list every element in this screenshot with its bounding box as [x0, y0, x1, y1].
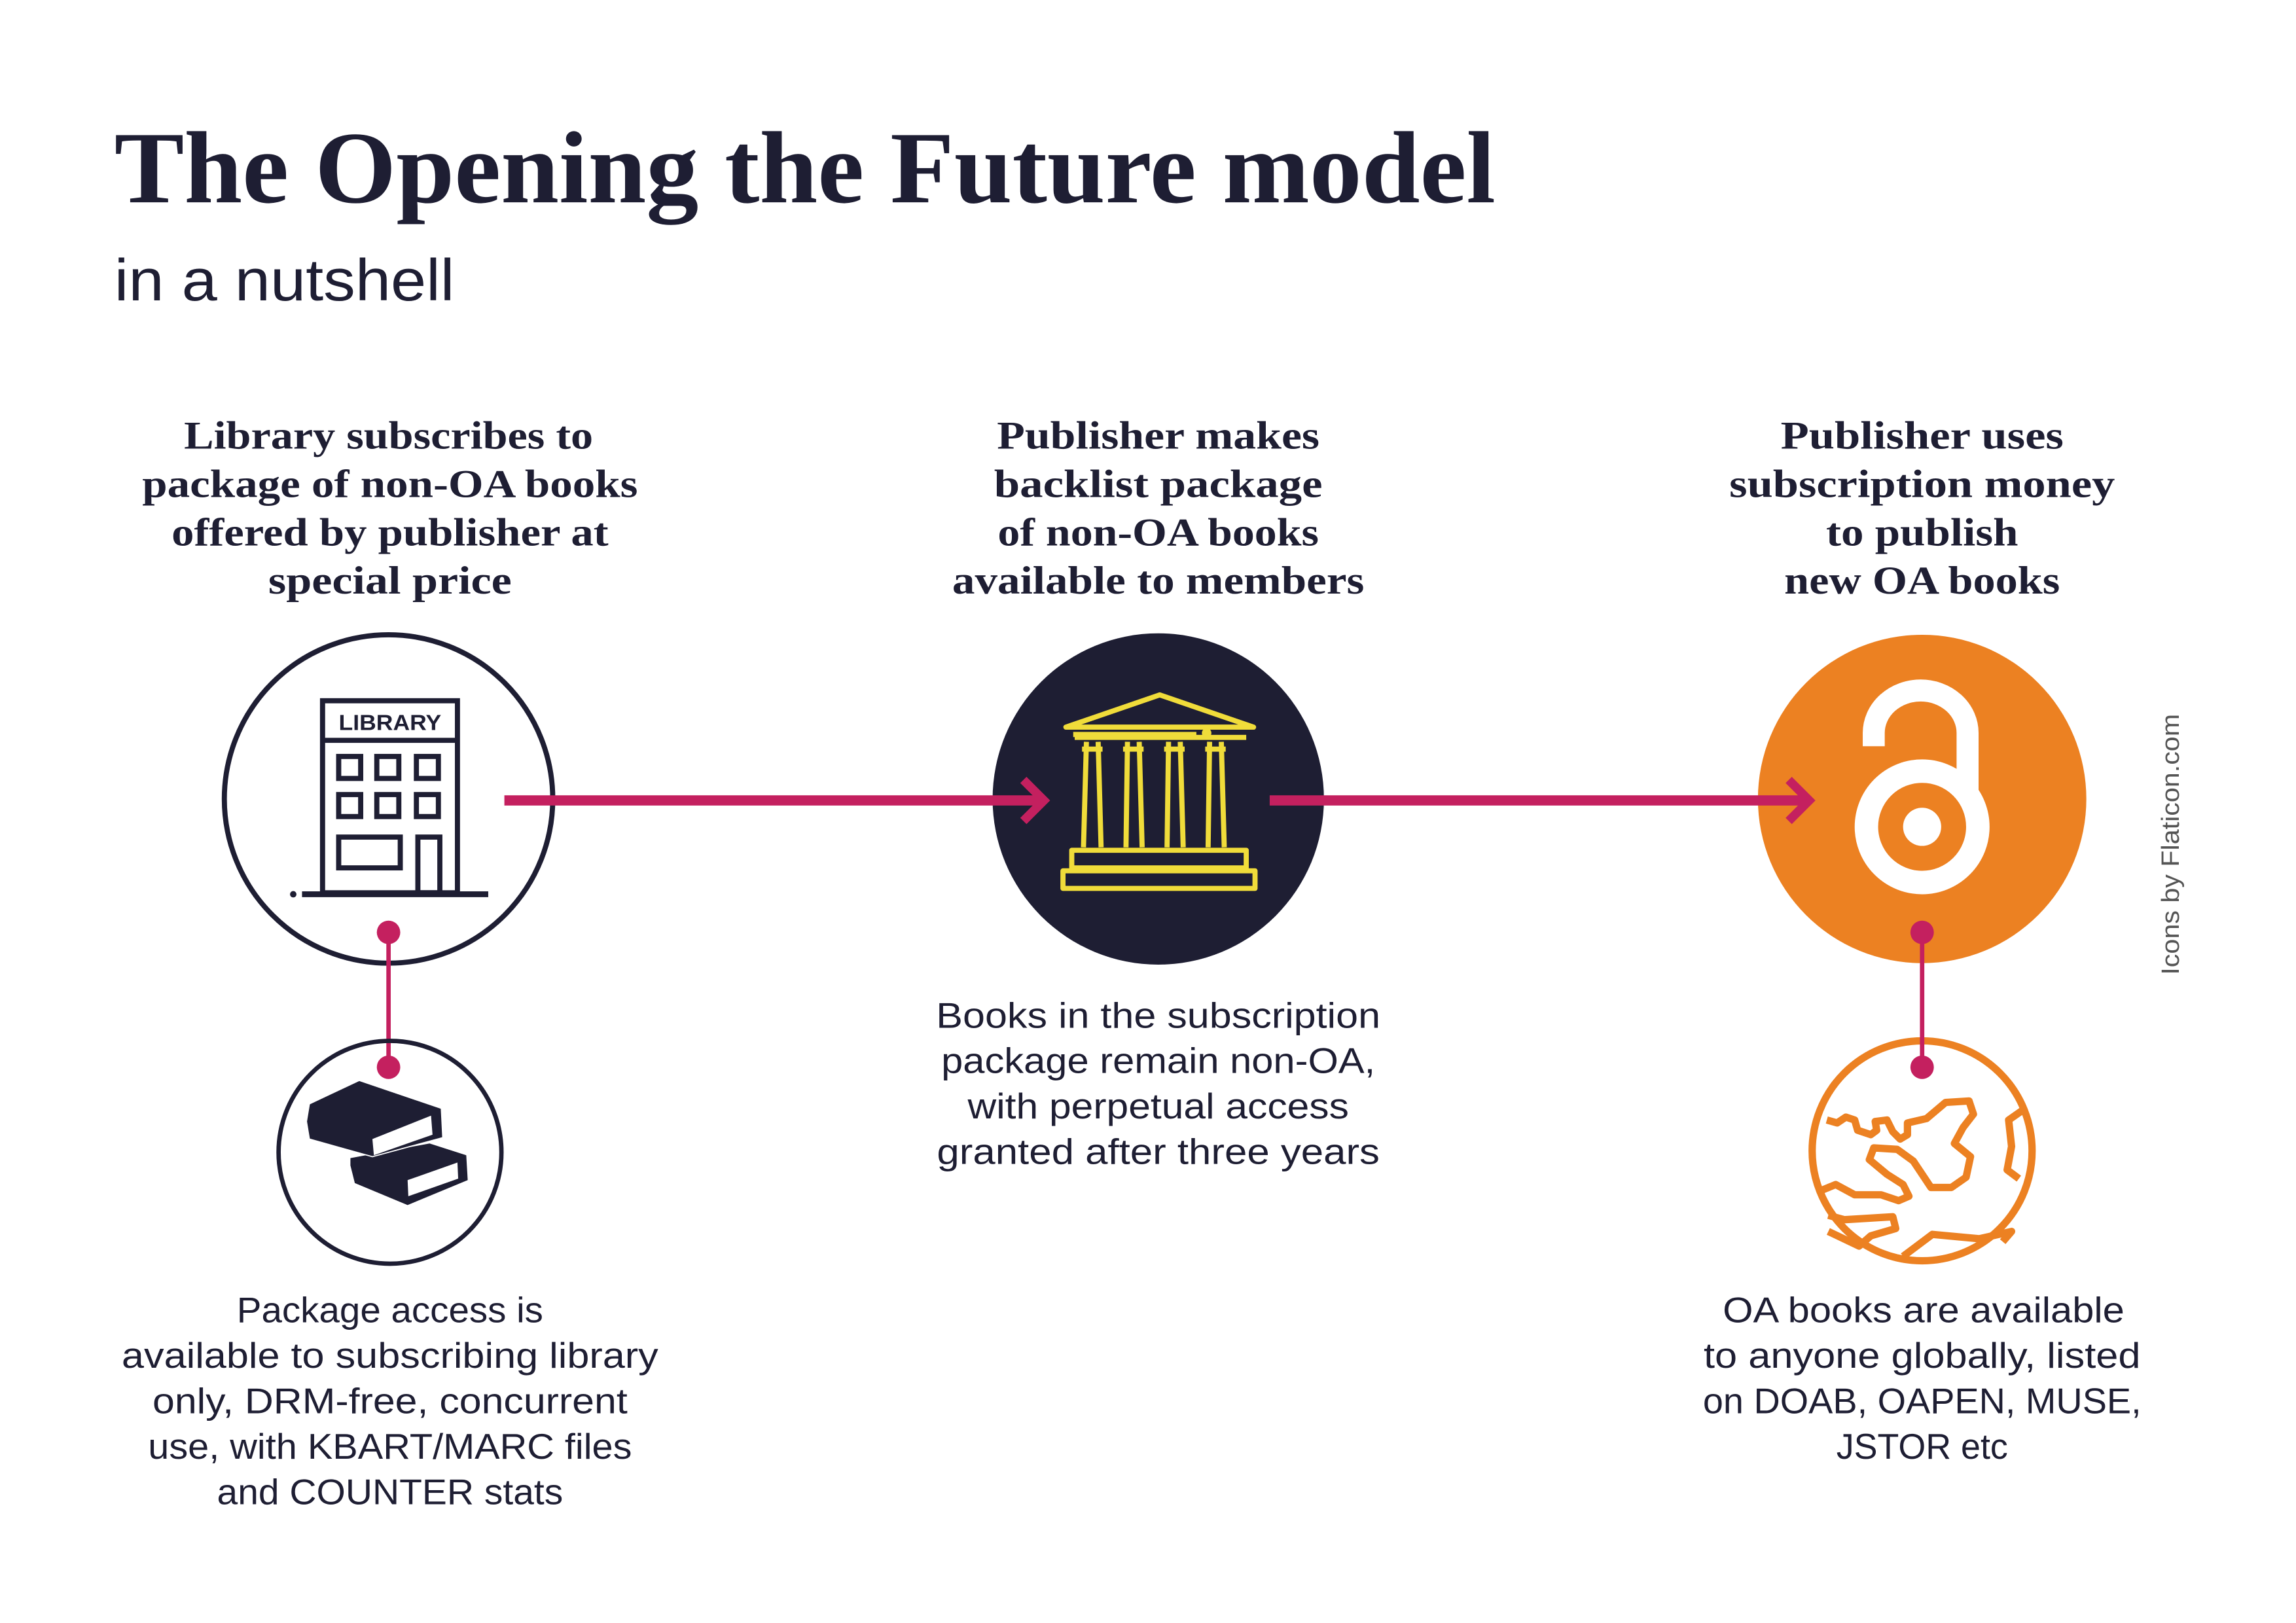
heading: step 2: backlist package — [994, 462, 1323, 506]
title: The Opening the Future model — [115, 111, 1496, 225]
heading: step 1: Library subscribes to — [184, 414, 593, 457]
heading: step 2: of non-OA books — [997, 510, 1319, 554]
icon: publisher circle — [993, 633, 1324, 965]
arrow: library to publisher — [505, 780, 1044, 821]
text block: middle description: granted after three years — [937, 1132, 1380, 1172]
icon: library circle: LIBRARY — [338, 711, 441, 736]
heading: step 1 — [142, 414, 637, 603]
heading: step 1: package of non-OA books — [142, 462, 637, 506]
text block: left description: only, DRM-free, concurrent — [152, 1380, 628, 1421]
text block: middle description: package remain non-OA, — [941, 1041, 1375, 1081]
heading: step 1: offered by publisher at — [171, 510, 609, 554]
text block: right description: on DOAB, OAPEN, MUSE, — [1703, 1380, 2142, 1421]
heading: step 3: subscription money — [1729, 462, 2115, 506]
icon: books circle — [279, 1041, 501, 1264]
heading: step 3: new OA books — [1784, 559, 2060, 603]
icon: open access circle — [1758, 635, 2087, 963]
connector: library to books — [377, 921, 401, 1079]
subtitle: in a nutshell — [115, 247, 454, 313]
text block: middle description — [936, 995, 1380, 1172]
text block: right description — [1703, 1290, 2142, 1467]
connector: OA to globe — [1910, 921, 1934, 1079]
text block: left description: use, with KBART/MARC files — [148, 1426, 632, 1467]
heading: step 1: special price — [268, 559, 512, 603]
text block: left description: Package access is — [237, 1290, 543, 1330]
credit: icons by flaticon: Icons by Flaticon.com — [2157, 714, 2185, 975]
heading: step 3 — [1729, 414, 2115, 603]
heading: step 2 — [952, 414, 1364, 603]
heading: step 3: to publish — [1826, 510, 2018, 554]
text block: right description: OA books are available — [1723, 1290, 2125, 1330]
text block: middle description: Books in the subscription — [936, 995, 1380, 1035]
text block: right description: to anyone globally, listed — [1704, 1335, 2141, 1376]
heading: step 2: Publisher makes — [997, 414, 1319, 457]
text block: right description: JSTOR etc — [1837, 1426, 2008, 1467]
text block: left description — [122, 1290, 658, 1512]
icon: globe circle — [1812, 1041, 2032, 1260]
heading: step 3: Publisher uses — [1781, 414, 2064, 457]
text block: left description: available to subscribing library — [122, 1335, 658, 1376]
heading: step 2: available to members — [952, 559, 1364, 603]
icon: library circle — [224, 635, 553, 963]
text block: middle description: with perpetual access — [967, 1086, 1349, 1126]
arrow: publisher to OA — [1270, 780, 1809, 821]
text block: left description: and COUNTER stats — [217, 1471, 563, 1512]
